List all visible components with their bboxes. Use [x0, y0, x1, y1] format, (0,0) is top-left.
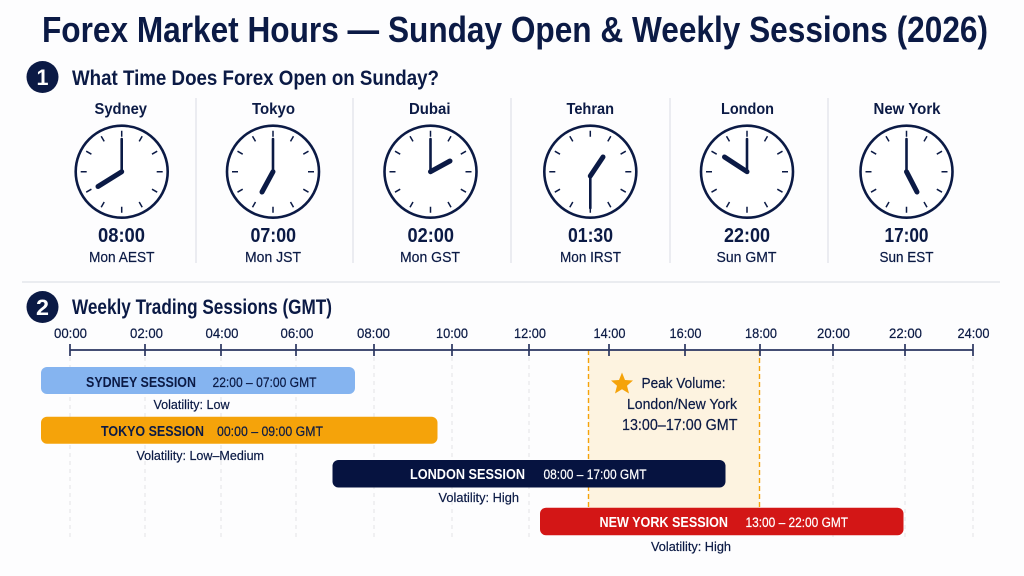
- session bar: London: LONDON SESSION: [410, 467, 525, 483]
- peak volume callout: London/New York: [627, 397, 738, 413]
- section 1 badge: 1: [36, 65, 48, 90]
- clock column: Dubai: Mon GST: [400, 249, 460, 266]
- clock column: Sydney: 08:00: [98, 225, 145, 247]
- clock column: Tokyo: Tokyo: [252, 101, 295, 118]
- clock face: Sydney 08:00: [76, 126, 168, 218]
- clock column: New York: 17:00: [884, 225, 928, 247]
- peak volume callout: [611, 372, 738, 434]
- peak volume callout: 13:00–17:00 GMT: [622, 417, 738, 434]
- session bar: Tokyo: 00:00 – 09:00 GMT: [217, 424, 323, 439]
- section 2: weekly trading sessions: [26, 291, 990, 554]
- clock column: London: 22:00: [724, 225, 770, 247]
- clock column: Dubai: [384, 101, 476, 266]
- section 2 badge: [26, 291, 58, 323]
- clock column: Tokyo: 07:00: [250, 225, 296, 247]
- timeline axis: 12:00: [514, 326, 546, 341]
- section 1 badge: [26, 61, 58, 93]
- clock column: Tehran: Tehran: [566, 101, 614, 118]
- peak volume callout: Peak Volume:: [642, 376, 726, 392]
- session bar: New York: NEW YORK SESSION: [600, 515, 728, 531]
- clock column: London: London: [721, 101, 774, 118]
- peak volume highlight band: [588, 350, 760, 508]
- clock face: Dubai 02:00: [384, 126, 476, 218]
- icon: star: [611, 372, 633, 394]
- clock face: Tehran 01:30: [544, 126, 636, 218]
- timeline axis: 02:00: [130, 326, 163, 341]
- section 1: Sunday open clocks: [26, 61, 952, 266]
- session bar: Tokyo: TOKYO SESSION: [101, 424, 204, 440]
- session bar: Sydney: 22:00 – 07:00 GMT: [212, 375, 316, 390]
- session bar: Tokyo: [41, 417, 438, 463]
- clock column: New York: New York: [874, 101, 941, 118]
- session bar: London: 08:00 – 17:00 GMT: [544, 467, 646, 482]
- clock face: New York 17:00: [860, 126, 952, 218]
- clock column: Sydney: Sydney: [94, 101, 147, 118]
- timeline axis: 06:00: [280, 326, 314, 341]
- timeline axis: 08:00: [357, 326, 390, 341]
- timeline axis: 04:00: [206, 326, 238, 341]
- timeline axis: 00:00: [54, 326, 87, 341]
- clock column: Tehran: [544, 101, 636, 266]
- timeline axis: 20:00: [817, 326, 850, 341]
- section 2 badge: 2: [36, 295, 49, 320]
- timeline axis: 22:00: [889, 326, 922, 341]
- clock column: New York: [860, 101, 952, 266]
- section 1 heading: What Time Does Forex Open on Sunday?: [72, 67, 439, 90]
- clock column: Sydney: Mon AEST: [89, 249, 154, 266]
- timeline axis: 16:00: [670, 326, 702, 341]
- clock face: Tokyo 07:00: [227, 126, 319, 218]
- session bar: Sydney: [41, 367, 355, 412]
- session bar: London: [332, 460, 726, 505]
- clock column: Tokyo: Mon JST: [245, 249, 301, 266]
- session bar: New York: [540, 508, 904, 554]
- timeline axis: 14:00: [594, 326, 626, 341]
- clock column: London: [701, 101, 793, 266]
- clock column: New York: Sun EST: [880, 249, 934, 266]
- session bar: New York: 13:00 – 22:00 GMT: [746, 515, 848, 530]
- clock column: Sydney: [76, 101, 168, 266]
- session bar: Sydney: Volatility: Low: [154, 397, 230, 412]
- session bar: New York: Volatility: High: [651, 539, 731, 554]
- timeline axis: 18:00: [745, 326, 777, 341]
- clock face: London 22:00: [701, 126, 793, 218]
- clock column: Tehran: Mon IRST: [560, 249, 621, 266]
- clock column: Tokyo: [227, 101, 319, 266]
- clock column: Tehran: 01:30: [568, 225, 613, 247]
- timeline axis: 10:00: [436, 326, 468, 341]
- timeline axis: [54, 326, 990, 356]
- clock column: London: Sun GMT: [716, 249, 776, 266]
- section 2 heading: Weekly Trading Sessions (GMT): [72, 296, 332, 319]
- timeline axis: 24:00: [958, 326, 990, 341]
- session bar: Tokyo: Volatility: Low–Medium: [136, 448, 264, 463]
- session bar: Sydney: SYDNEY SESSION: [86, 375, 196, 391]
- clock column: Dubai: 02:00: [408, 225, 454, 247]
- session bar: London: Volatility: High: [438, 490, 519, 505]
- clock column: Dubai: Dubai: [409, 101, 450, 118]
